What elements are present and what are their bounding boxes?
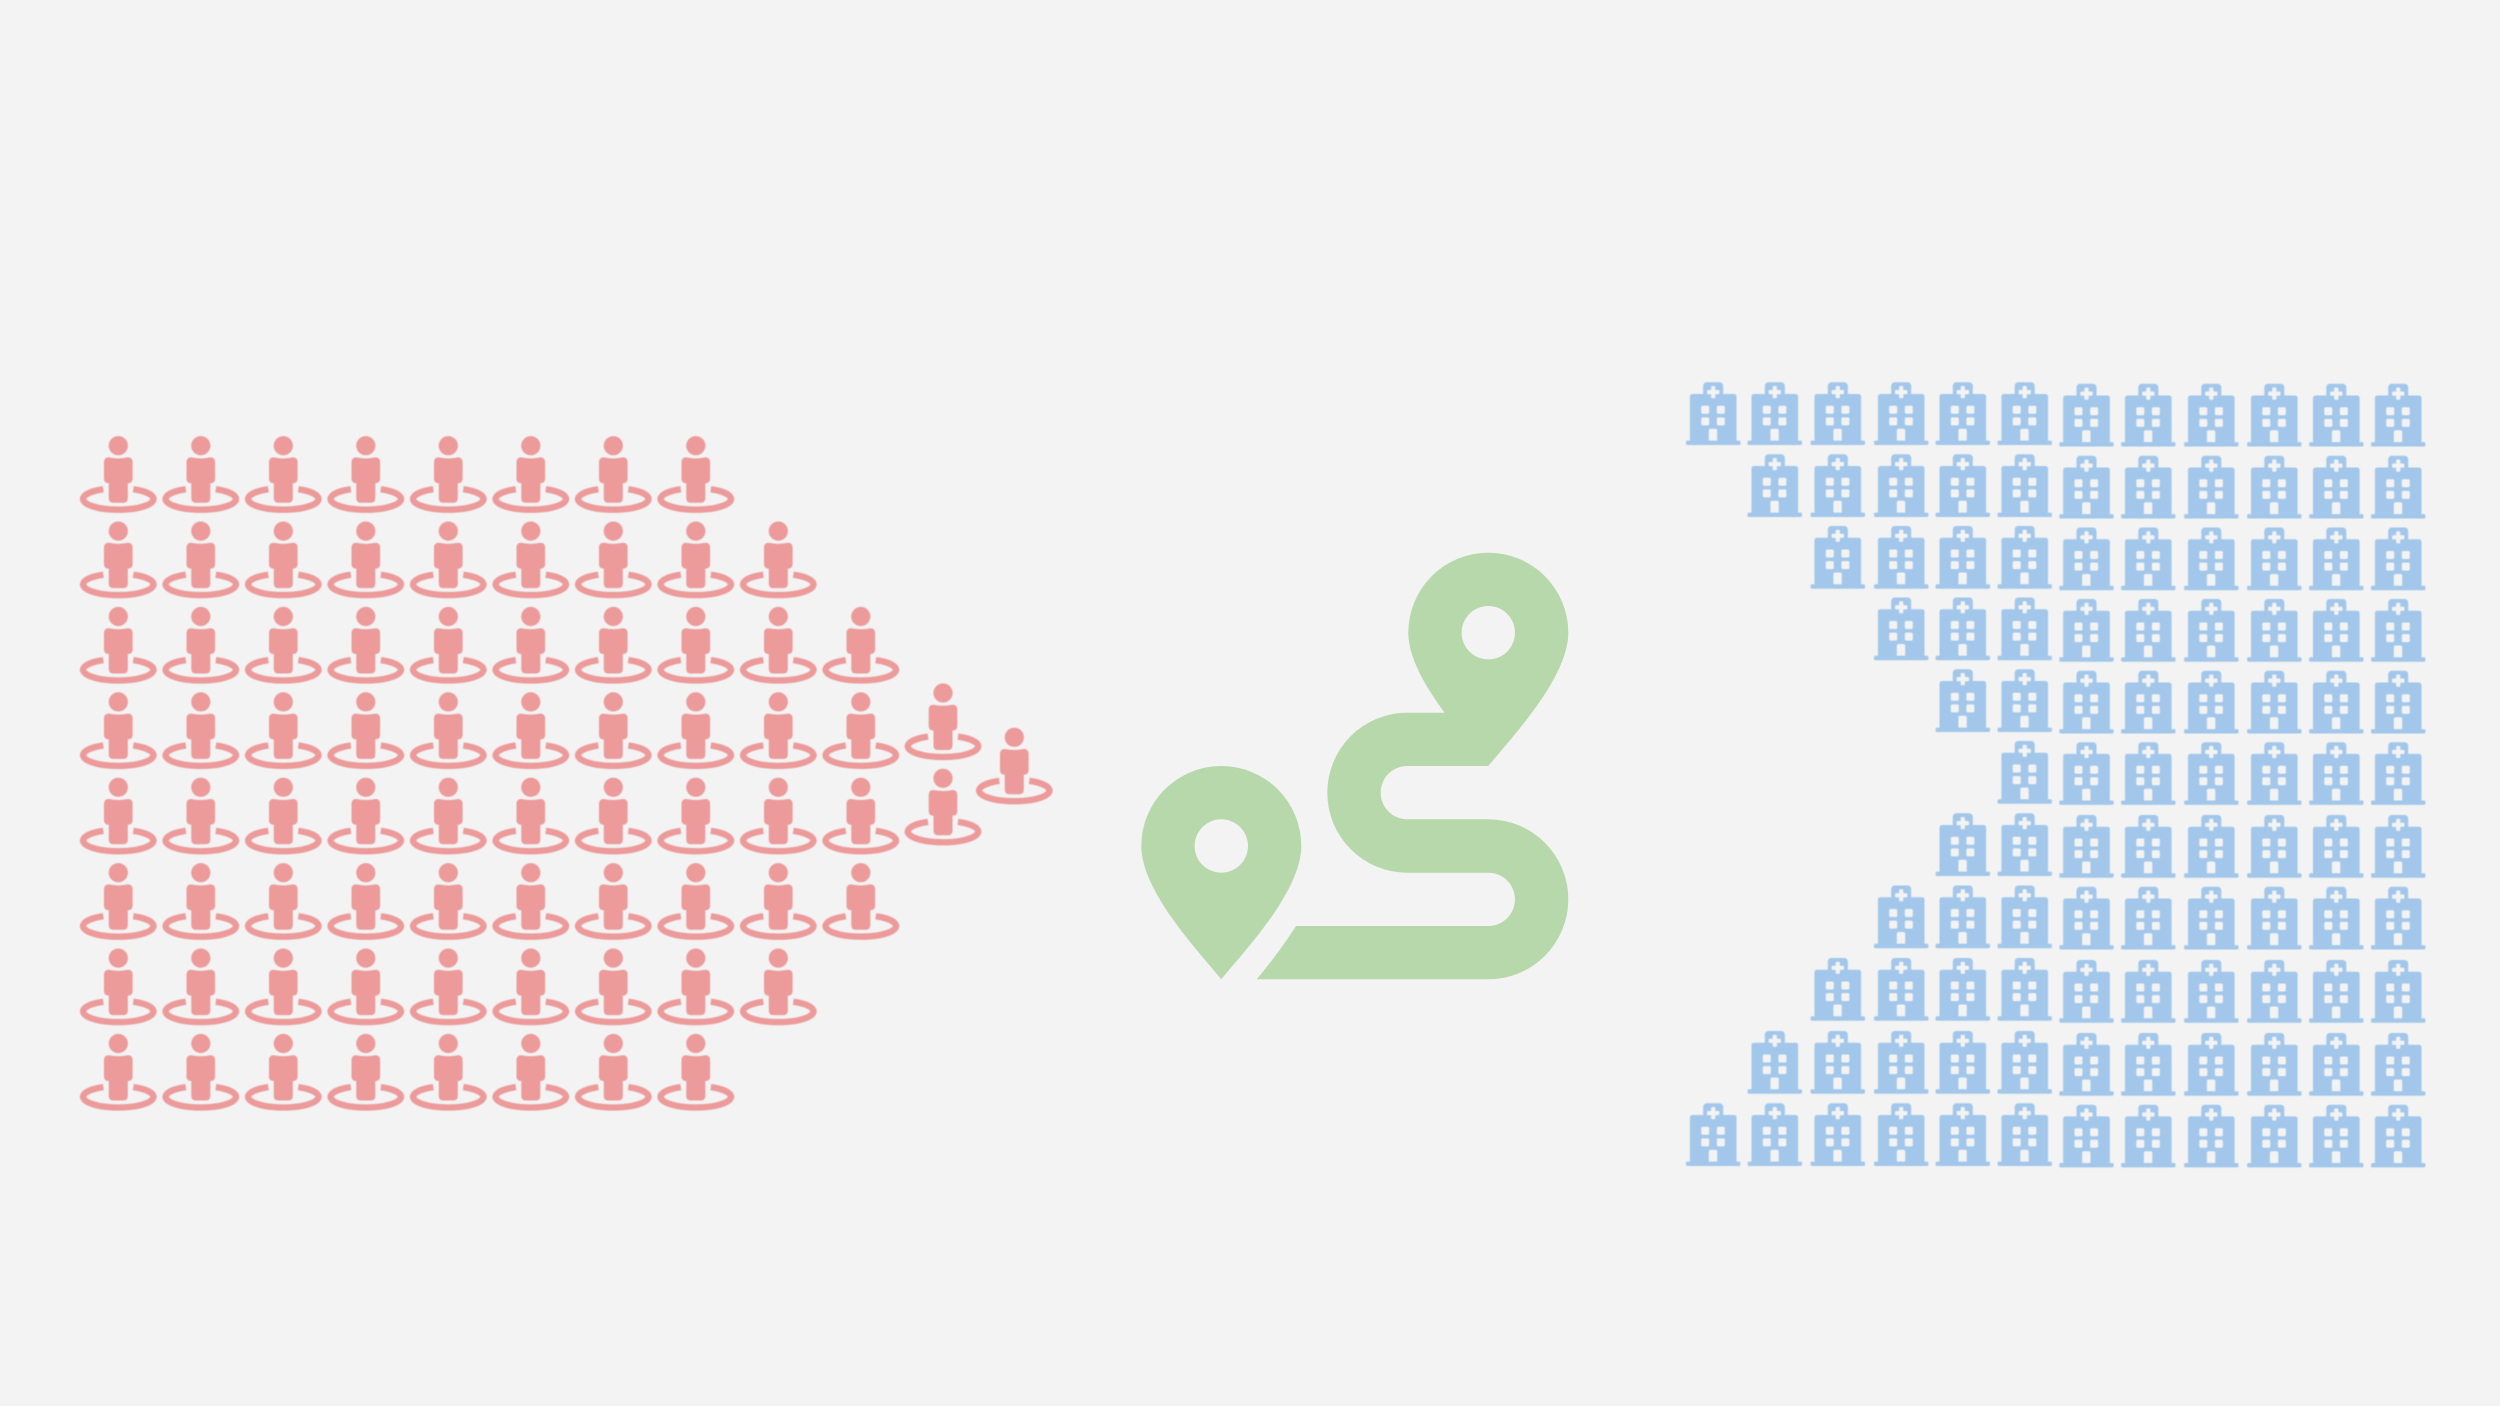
row of people 4 [83, 692, 896, 766]
row of hospitals 2 [1748, 454, 2425, 518]
people at the tip of the arrow shape [908, 683, 1050, 842]
row of hospitals 7 [1936, 813, 2425, 878]
icon: origin pin [1141, 766, 1301, 979]
row of people 8 [83, 1034, 731, 1107]
row of hospitals 10 [1748, 1031, 2425, 1096]
row of hospitals 4 [1874, 598, 2425, 662]
row of people 7 [83, 948, 814, 1022]
row of people 6 [83, 863, 896, 937]
panel: crowd of people [83, 436, 1050, 1107]
row of hospitals 8 [1874, 886, 2425, 950]
icon: route between two map pins [1141, 553, 1568, 979]
row of hospitals 3 [1811, 526, 2425, 590]
icon: winding road [1257, 713, 1568, 979]
row of hospitals 11 [1686, 1103, 2425, 1167]
row of people 3 [83, 607, 896, 680]
row of hospitals 9 [1811, 958, 2425, 1023]
row of hospitals 1 [1686, 382, 2425, 446]
row of people 1 [83, 436, 731, 510]
row of people 5 [83, 778, 896, 851]
row of hospitals 6 [1998, 741, 2425, 805]
panel: grid of hospitals [1686, 382, 2425, 1167]
row of hospitals 5 [1936, 669, 2425, 734]
icon: destination pin [1408, 553, 1568, 766]
row of people 2 [83, 522, 814, 595]
